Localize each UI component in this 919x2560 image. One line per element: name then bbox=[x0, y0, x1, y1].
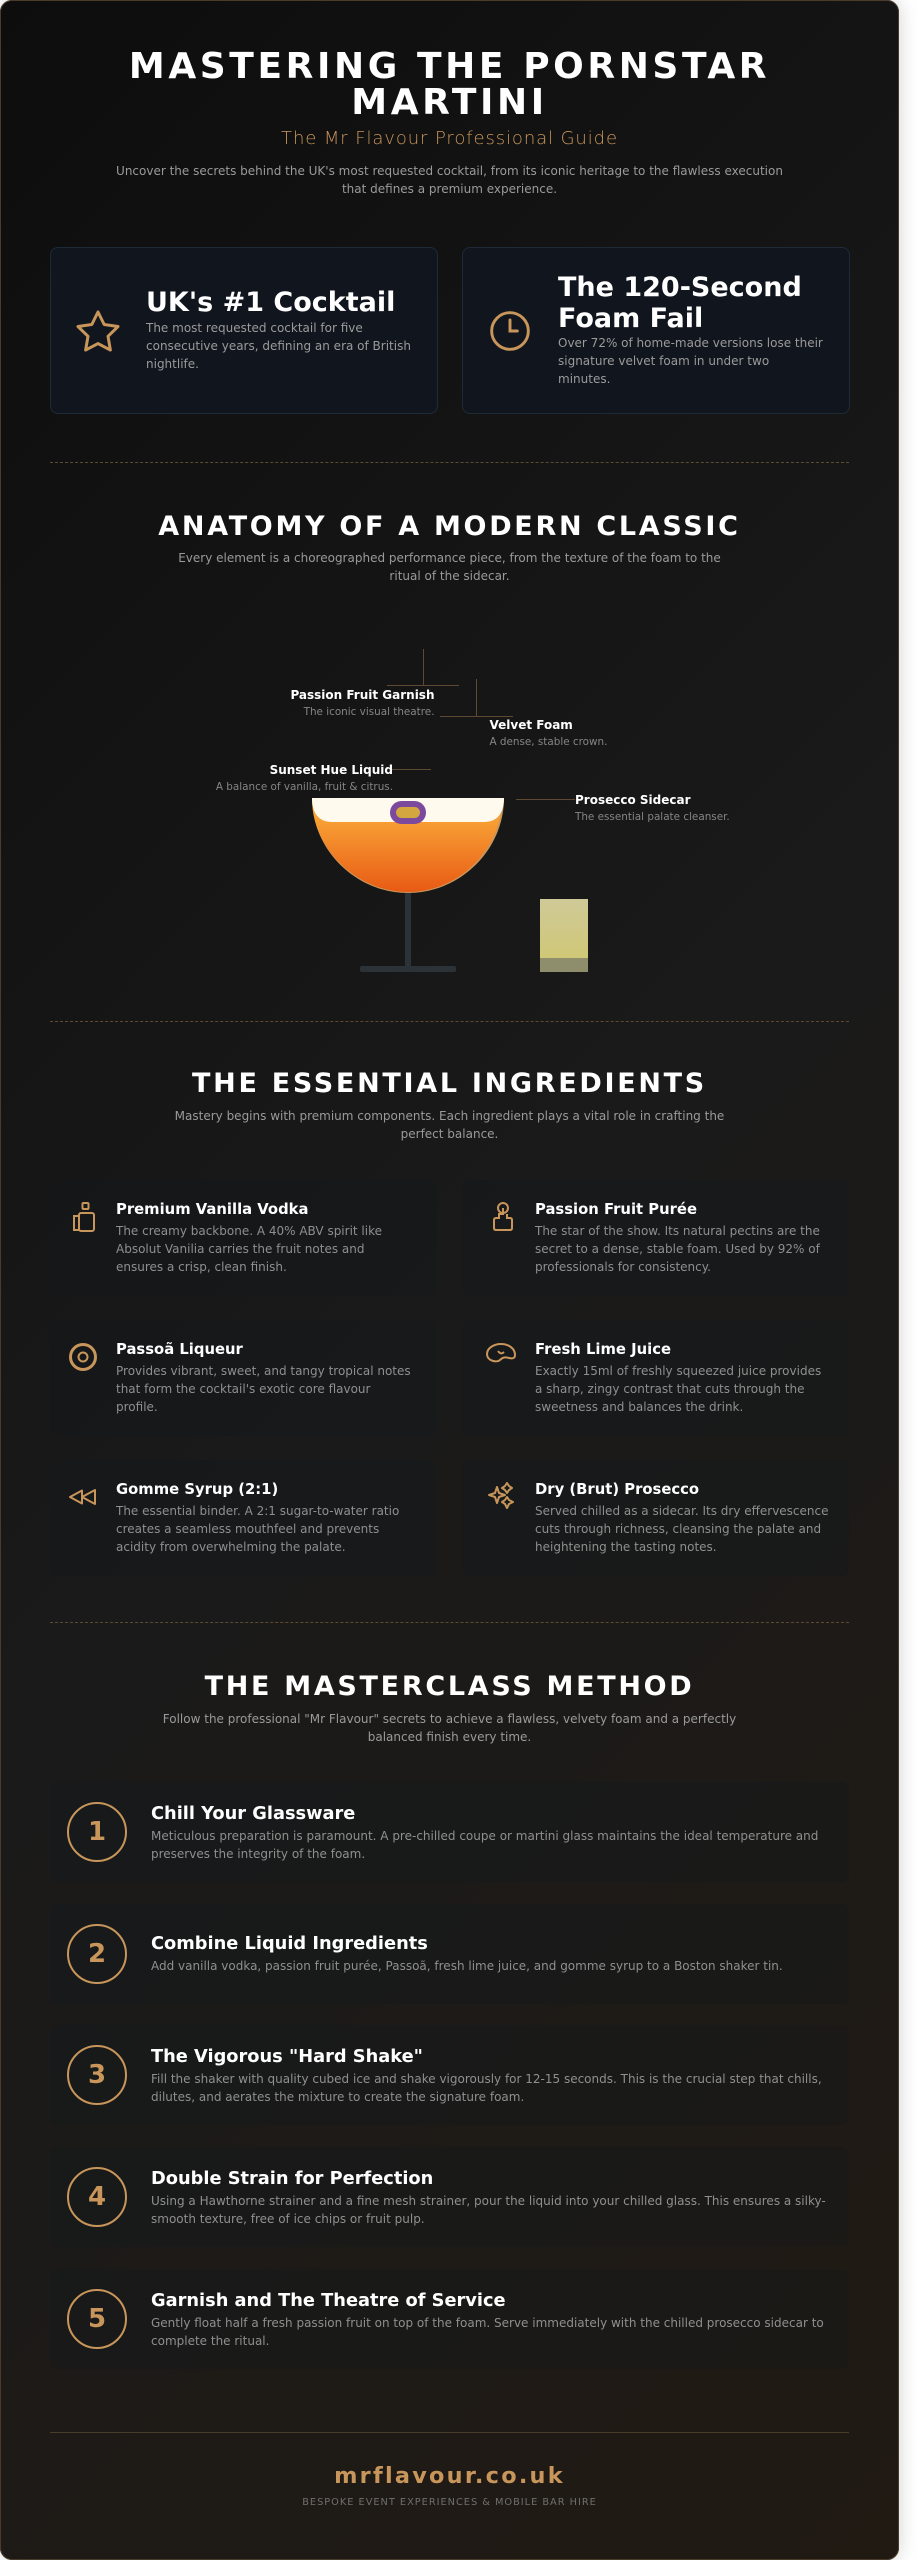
stat heading bbox=[558, 272, 802, 334]
step 2 bbox=[50, 1904, 849, 2004]
step 1 bbox=[50, 1782, 849, 1882]
stat heading: Foam Fail bbox=[558, 303, 703, 334]
step text: Fill the shaker with quality cubed ice and shake vigorously for 12-15 seconds. This is the crucial step that chills, bbox=[151, 2072, 822, 2086]
stat text bbox=[146, 321, 411, 371]
ingredient description: Absolut Vanilia carries the fruit notes and bbox=[116, 1242, 364, 1256]
ingredient description bbox=[116, 1224, 382, 1274]
stat heading: The 120-Second bbox=[558, 272, 802, 303]
step title: Double Strain for Perfection bbox=[151, 2168, 433, 2189]
ingredient description: Provides vibrant, sweet, and tangy tropical notes bbox=[116, 1364, 411, 1378]
step number: 4 bbox=[88, 2182, 106, 2212]
label: velvet foam: A dense, stable crown. bbox=[490, 736, 607, 748]
step number: 2 bbox=[88, 1939, 106, 1969]
ingredient description: Served chilled as a sidecar. Its dry effervescence bbox=[535, 1504, 829, 1518]
label: prosecco sidecar: The essential palate cleanser. bbox=[575, 811, 730, 823]
stat text: minutes. bbox=[558, 372, 610, 386]
anatomy intro bbox=[178, 551, 721, 583]
ingredient description bbox=[116, 1504, 399, 1554]
label: velvet foam bbox=[490, 718, 607, 748]
stat text: Over 72% of home-made versions lose their bbox=[558, 336, 823, 350]
step text: Gently float half a fresh passion fruit on top of the foam. Serve immediately with the chilled prosecco sidecar to bbox=[151, 2316, 824, 2330]
ingredient: prosecco bbox=[462, 1460, 849, 1576]
step number bbox=[67, 2045, 127, 2105]
step 4 bbox=[50, 2147, 849, 2247]
step number: 5 bbox=[88, 2304, 106, 2334]
stat heading: UK's #1 Cocktail bbox=[146, 287, 395, 318]
step number bbox=[67, 2167, 127, 2227]
step text bbox=[151, 2316, 824, 2348]
label: passion fruit garnish: The iconic visual theatre. bbox=[304, 706, 434, 718]
ingredient description: The essential binder. A 2:1 sugar-to-water ratio bbox=[116, 1504, 399, 1518]
step title: Garnish and The Theatre of Service bbox=[151, 2290, 506, 2311]
step text: Meticulous preparation is paramount. A pre-chilled coupe or martini glass maintains the ideal temperature and bbox=[151, 1829, 818, 1843]
step title: Combine Liquid Ingredients bbox=[151, 1933, 428, 1954]
icon: sparkles bbox=[488, 1482, 514, 1509]
liquid bbox=[312, 798, 502, 892]
heading: method: THE MASTERCLASS METHOD bbox=[205, 1671, 694, 1702]
leader lines bbox=[387, 649, 575, 800]
stat text: signature velvet foam in under two bbox=[558, 354, 769, 368]
ingredient description: acidity from overwhelming the palate. bbox=[116, 1540, 346, 1554]
label: prosecco sidecar bbox=[575, 793, 730, 823]
icon: rewind bbox=[69, 1489, 96, 1505]
step text: Using a Hawthorne strainer and a fine mesh strainer, pour the liquid into your chilled glass. This ensures a silky- bbox=[151, 2194, 826, 2208]
ingredients intro: Mastery begins with premium components. Each ingredient plays a vital role in crafting the bbox=[175, 1109, 724, 1123]
ingredient description: Exactly 15ml of freshly squeezed juice provides bbox=[535, 1364, 821, 1378]
ingredient description: ensures a crisp, clean finish. bbox=[116, 1260, 287, 1274]
label: velvet foam: Velvet Foam bbox=[490, 718, 573, 732]
step text bbox=[151, 2194, 826, 2226]
stat text: The most requested cocktail for five bbox=[146, 321, 363, 335]
step number: 1 bbox=[88, 1817, 106, 1847]
ingredient: passion fruit bbox=[462, 1180, 849, 1296]
ingredients intro: perfect balance. bbox=[401, 1127, 498, 1141]
step text: smooth texture, free of ice chips or fruit pulp. bbox=[151, 2212, 425, 2226]
ingredient: gomme bbox=[50, 1460, 437, 1576]
label: prosecco sidecar: Prosecco Sidecar bbox=[575, 793, 690, 807]
stat card: UK's number one cocktail bbox=[50, 247, 438, 414]
intro text: Uncover the secrets behind the UK's most requested cocktail, from its iconic heritage to the flawless execution bbox=[116, 164, 783, 178]
icon: lime bbox=[486, 1343, 516, 1362]
sidecar glass bbox=[540, 899, 588, 958]
ingredient description bbox=[534, 1224, 820, 1274]
heading: ingredients: THE ESSENTIAL INGREDIENTS bbox=[192, 1068, 707, 1099]
foam bbox=[312, 798, 504, 822]
step 5 bbox=[50, 2269, 849, 2369]
anatomy intro: Every element is a choreographed performance piece, from the texture of the foam to the bbox=[178, 551, 721, 565]
ingredient description: The star of the show. Its natural pectins are the bbox=[535, 1224, 820, 1238]
ingredient name: Fresh Lime Juice bbox=[535, 1341, 671, 1358]
method intro bbox=[163, 1712, 736, 1744]
ingredients intro bbox=[175, 1109, 724, 1141]
anatomy intro: ritual of the sidecar. bbox=[389, 569, 510, 583]
step title: The Vigorous "Hard Shake" bbox=[151, 2046, 423, 2067]
icon: bottle bbox=[73, 1202, 95, 1232]
ingredient description: heightening the tasting notes. bbox=[535, 1540, 717, 1554]
ingredient description: creates a seamless mouthfeel and prevents bbox=[116, 1522, 379, 1536]
ingredient description: cuts through richness, cleansing the palate and bbox=[535, 1522, 821, 1536]
intro text bbox=[116, 164, 783, 196]
ingredient description bbox=[116, 1364, 411, 1414]
step title: Chill Your Glassware bbox=[151, 1803, 355, 1824]
step number bbox=[67, 1802, 127, 1862]
step 3 bbox=[50, 2025, 849, 2125]
glass bowl bbox=[312, 798, 504, 893]
label: passion fruit garnish bbox=[290, 688, 434, 718]
footer logo: mrflavour.co.uk bbox=[334, 2463, 565, 2489]
step text: Add vanilla vodka, passion fruit purée, Passoã, fresh lime juice, and gomme syrup to a Boston shaker tin. bbox=[151, 1959, 783, 1973]
label: passion fruit garnish: Passion Fruit Garnish bbox=[290, 688, 434, 702]
icon: clock bbox=[490, 311, 530, 351]
icon: puree bbox=[493, 1202, 513, 1231]
ingredient description: professionals for consistency. bbox=[535, 1260, 711, 1274]
ingredient name: Gomme Syrup (2:1) bbox=[116, 1481, 278, 1498]
method intro: Follow the professional "Mr Flavour" secrets to achieve a flawless, velvety foam and a perfectly bbox=[163, 1712, 736, 1726]
title bbox=[129, 46, 770, 123]
stat text bbox=[558, 336, 823, 386]
heading: anatomy: ANATOMY OF A MODERN CLASSIC bbox=[158, 511, 741, 542]
step number bbox=[67, 1924, 127, 1984]
label: sunset hue liquid: A balance of vanilla, fruit & citrus. bbox=[216, 781, 393, 793]
sidecar base bbox=[540, 958, 588, 972]
ingredient description: The creamy backbone. A 40% ABV spirit like bbox=[116, 1224, 382, 1238]
ingredient description bbox=[535, 1364, 821, 1414]
intro text: that defines a premium experience. bbox=[342, 182, 557, 196]
passion fruit garnish bbox=[393, 804, 423, 821]
cocktail diagram bbox=[312, 649, 588, 972]
step text bbox=[151, 1829, 818, 1861]
ingredient description: that form the cocktail's exotic core flavour bbox=[116, 1382, 370, 1396]
title: MARTINI bbox=[351, 82, 548, 123]
ingredient name: Passoã Liqueur bbox=[116, 1341, 243, 1358]
method intro: balanced finish every time. bbox=[368, 1730, 531, 1744]
stat text: nightlife. bbox=[146, 357, 199, 371]
label: sunset hue liquid bbox=[216, 763, 393, 793]
ingredient description: sweetness and balances the drink. bbox=[535, 1400, 743, 1414]
ingredient description bbox=[535, 1504, 829, 1554]
ingredient name: Premium Vanilla Vodka bbox=[116, 1201, 309, 1218]
ingredient: passoa bbox=[50, 1320, 437, 1436]
ingredient description: a sharp, zingy contrast that cuts through the bbox=[535, 1382, 804, 1396]
label: sunset hue liquid: Sunset Hue Liquid bbox=[270, 763, 393, 777]
stat card: foam fail bbox=[462, 247, 850, 414]
icon: star bbox=[76, 310, 120, 352]
step text bbox=[151, 2072, 822, 2104]
stat text: consecutive years, defining an era of British bbox=[146, 339, 411, 353]
title: MASTERING THE PORNSTAR bbox=[129, 46, 770, 87]
footer tagline: BESPOKE EVENT EXPERIENCES & MOBILE BAR HIRE bbox=[302, 2497, 597, 2508]
ingredient name: Dry (Brut) Prosecco bbox=[535, 1481, 699, 1498]
icon: disc bbox=[69, 1343, 97, 1371]
ingredient description: secret to a dense, stable foam. Used by 92% of bbox=[535, 1242, 820, 1256]
ingredient name: Passion Fruit Purée bbox=[535, 1201, 697, 1218]
stem bbox=[405, 893, 411, 967]
step number bbox=[67, 2289, 127, 2349]
step text: dilutes, and aerates the mixture to create the signature foam. bbox=[151, 2090, 524, 2104]
ingredient: lime bbox=[462, 1320, 849, 1436]
ingredient description: profile. bbox=[116, 1400, 158, 1414]
step number: 3 bbox=[88, 2060, 106, 2090]
base bbox=[360, 966, 456, 972]
ingredient: vodka bbox=[50, 1180, 437, 1296]
step text: complete the ritual. bbox=[151, 2334, 269, 2348]
subtitle: The Mr Flavour Professional Guide bbox=[281, 128, 618, 149]
step text: preserves the integrity of the foam. bbox=[151, 1847, 365, 1861]
